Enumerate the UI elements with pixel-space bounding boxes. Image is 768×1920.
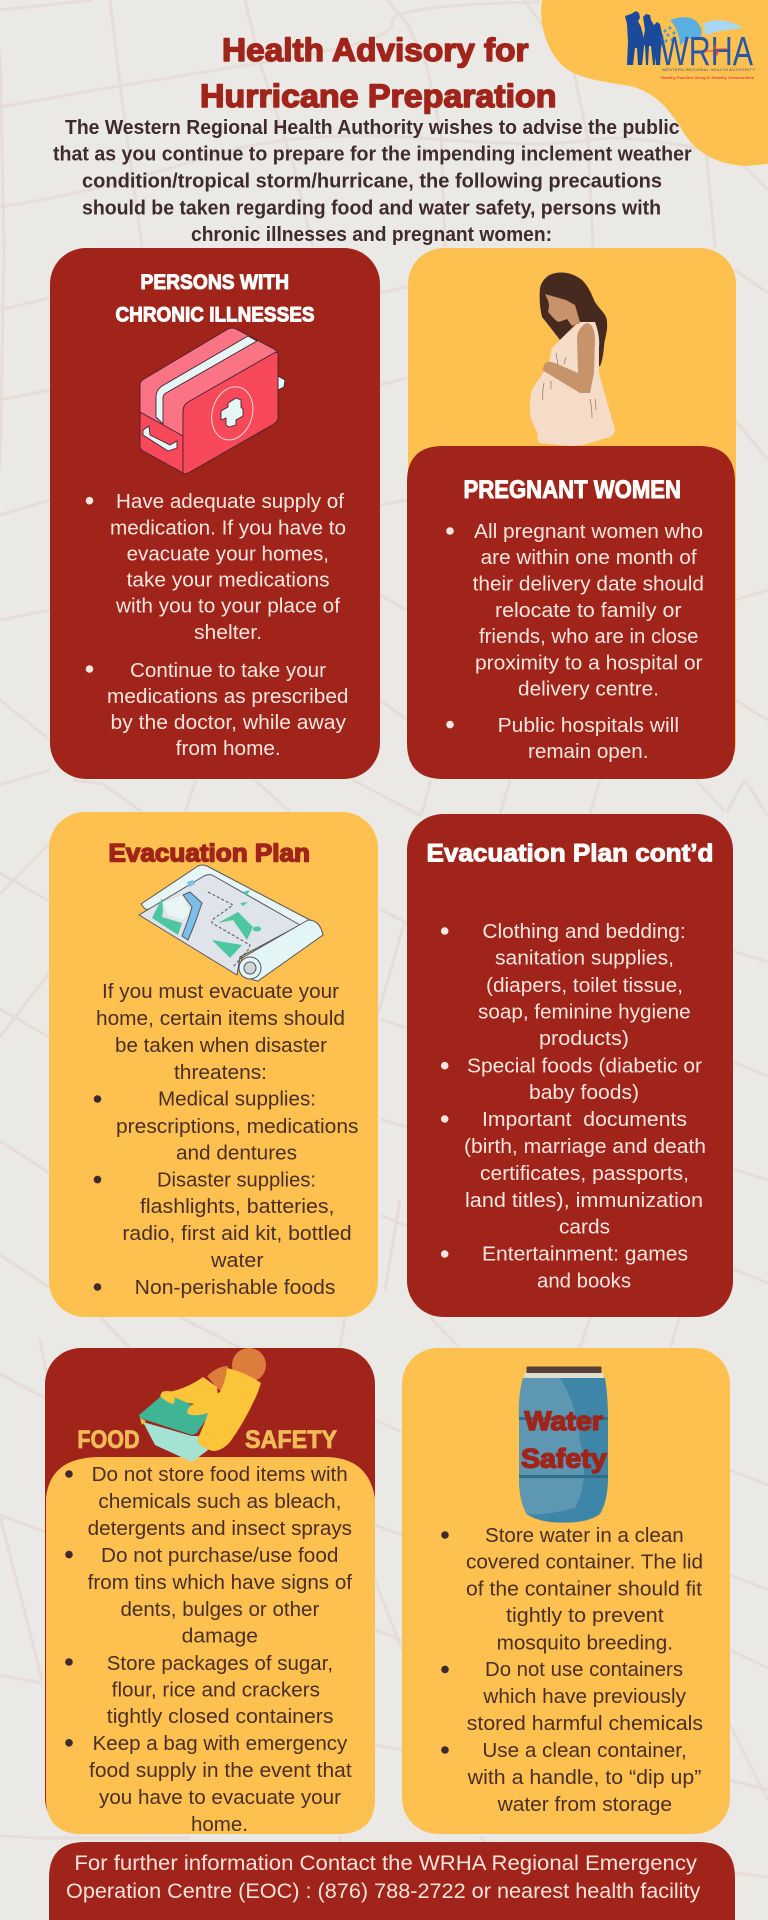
panel: evacuation plan continued: [407, 814, 733, 1317]
heading: water safety: Water: [524, 1406, 603, 1436]
heading: food safety: [77, 1426, 337, 1454]
text: pregnant women advice: are within one month of: [481, 547, 697, 569]
text: water safety advice: stored harmful chemicals: [467, 1713, 703, 1735]
text: pregnant women advice: [446, 521, 704, 763]
intro text: The Western Regional Health Authority wishes to advise the public: [65, 117, 680, 139]
text: food safety advice: Do not purchase/use food: [101, 1545, 338, 1567]
icon: water barrel: [519, 1366, 608, 1523]
intro text: chronic illnesses and pregnant women:: [191, 224, 552, 246]
text: evacuation items list continued: products): [539, 1028, 629, 1050]
text: evacuation items list: and dentures: [176, 1143, 297, 1165]
text: evacuation items list continued: and books: [537, 1270, 631, 1292]
title: [200, 32, 556, 114]
text: pregnant women advice: their delivery date should: [473, 574, 704, 596]
heading: pregnant women: PREGNANT WOMEN: [464, 476, 681, 504]
text: evacuation items list continued: soap, feminine hygiene: [478, 1002, 691, 1024]
text: water safety advice: tightly to prevent: [506, 1605, 664, 1627]
icon: rolled map: [139, 865, 323, 981]
text: chronic illness advice: Have adequate supply of: [116, 491, 344, 513]
heading: evacuation plan: Evacuation Plan: [108, 839, 310, 867]
text: evacuation items list continued: baby foods): [529, 1082, 639, 1104]
text: food safety advice: flour, rice and crackers: [112, 1680, 320, 1702]
text: water safety advice: Use a clean container,: [482, 1740, 687, 1762]
text: pregnant women advice: delivery centre.: [518, 679, 659, 701]
text: evacuation items list: be taken when disaster: [115, 1035, 327, 1057]
text: evacuation items list: Medical supplies:: [158, 1089, 316, 1111]
text: chronic illness advice: from home.: [176, 738, 281, 760]
text: food safety advice: Keep a bag with emergency: [93, 1733, 347, 1755]
text: chronic illness advice: take your medications: [127, 569, 330, 591]
panel: persons with chronic illnesses: [50, 248, 380, 779]
heading: food safety: FOOD: [77, 1426, 140, 1454]
text: food safety advice: dents, bulges or other: [120, 1599, 320, 1621]
footer: contact information: For further information Contact the WRHA Regional Emergency: [74, 1852, 698, 1875]
text: evacuation items list continued: Important documents: [482, 1109, 687, 1131]
text: food safety advice: Store packages of sugar,: [107, 1653, 333, 1675]
text: evacuation items list: [94, 981, 358, 1299]
text: chronic illness advice: evacuate your homes,: [127, 544, 329, 566]
text: chronic illness advice: medications as prescribed: [107, 686, 348, 708]
text: evacuation items list continued: land titles), immunization: [465, 1190, 703, 1212]
text: evacuation items list continued: sanitation supplies,: [495, 948, 674, 970]
footer: contact information: Operation Centre (EOC) : (876) 788-2722 or nearest health facility: [66, 1880, 701, 1903]
text: water safety advice: covered container. The lid: [466, 1552, 703, 1574]
text: water safety advice: with a handle, to “dip up”: [467, 1767, 701, 1789]
icon: pregnant woman: [530, 272, 615, 446]
text: water safety advice: water from storage: [497, 1794, 672, 1816]
text: evacuation items list: threatens:: [174, 1062, 267, 1084]
text: evacuation items list: Disaster supplies:: [157, 1169, 316, 1191]
panel: pregnant women: [407, 248, 736, 779]
icon: gloved hands holding food container: [139, 1348, 266, 1462]
title: Hurricane Preparation: [200, 78, 556, 114]
text: evacuation items list continued: (diapers, toilet tissue,: [486, 975, 683, 997]
sub-panel: pregnant women text: [407, 446, 735, 779]
text: water safety advice: mosquito breeding.: [497, 1632, 673, 1654]
text: evacuation items list continued: Special foods (diabetic or: [467, 1056, 702, 1078]
text: food safety advice: detergents and insect sprays: [88, 1518, 352, 1540]
panel: food safety: [45, 1348, 375, 1836]
text: food safety advice: from tins which have signs of: [88, 1572, 352, 1594]
text: evacuation items list: flashlights, batteries,: [140, 1196, 334, 1218]
heading: water safety: [521, 1406, 607, 1474]
text: evacuation items list continued: cards: [559, 1217, 610, 1239]
intro text: should be taken regarding food and water safety, persons with: [82, 198, 661, 220]
intro text: that as you continue to prepare for the impending inclement weather: [53, 144, 692, 166]
logo: WRHA: [625, 11, 755, 80]
intro text: condition/tropical storm/hurricane, the following precautions: [82, 171, 662, 193]
text: evacuation items list continued: Entertainment: games: [482, 1244, 688, 1266]
text: chronic illness advice: with you to your place of: [115, 596, 340, 618]
heading: persons with chronic illnesses: CHRONIC ILLNESSES: [116, 303, 314, 326]
icon: first aid kit: [140, 328, 285, 474]
text: chronic illness advice: by the doctor, while away: [110, 712, 346, 734]
text: evacuation items list continued: Clothing and bedding:: [482, 921, 686, 943]
text: pregnant women advice: remain open.: [528, 741, 648, 763]
text: evacuation items list: prescriptions, medications: [116, 1116, 358, 1138]
decorative corner blob: [541, 0, 768, 166]
sub-panel: food safety text background: [46, 1457, 375, 1834]
text: chronic illness advice: shelter.: [194, 622, 262, 644]
intro text: [53, 117, 692, 246]
text: pregnant women advice: All pregnant women who: [474, 521, 703, 543]
text: evacuation items list continued: (birth, marriage and death: [464, 1136, 706, 1158]
text: food safety advice: home.: [191, 1814, 248, 1836]
footer: contact information: [49, 1842, 735, 1920]
text: pregnant women advice: Public hospitals will: [498, 715, 679, 737]
text: evacuation items list: If you must evacuate your: [102, 981, 339, 1003]
text: chronic illness advice: medication. If you have to: [110, 518, 346, 540]
text: pregnant women advice: friends, who are in close: [479, 626, 698, 648]
text: food safety advice: chemicals such as bleach,: [98, 1491, 341, 1513]
heading: evacuation plan cont'd: Evacuation Plan cont’d: [426, 839, 714, 867]
heading: water safety: Safety: [521, 1444, 607, 1474]
text: chronic illness advice: Continue to take your: [130, 660, 326, 682]
text: food safety advice: [65, 1464, 352, 1836]
text: evacuation items list continued: [441, 921, 706, 1292]
heading: persons with chronic illnesses: [116, 271, 314, 326]
text: food safety advice: Do not store food items with: [92, 1464, 348, 1486]
text: evacuation items list: Non-perishable foods: [135, 1277, 336, 1299]
text: evacuation items list: radio, first aid kit, bottled: [122, 1223, 352, 1245]
title: Health Advisory for: [222, 32, 528, 68]
text: water safety advice: of the container should fit: [466, 1579, 702, 1601]
text: chronic illness advice: [86, 491, 348, 760]
text: evacuation items list: home, certain items should: [96, 1008, 345, 1030]
text: pregnant women advice: proximity to a hospital or: [475, 653, 703, 675]
heading: persons with chronic illnesses: PERSONS WITH: [140, 271, 289, 294]
text: water safety advice: [441, 1525, 703, 1816]
logo: WRHA: WESTERN REGIONAL HEALTH AUTHORITY: [662, 67, 755, 72]
text: water safety advice: which have previously: [482, 1686, 686, 1708]
text: water safety advice: Do not use containers: [485, 1659, 683, 1681]
text: pregnant women advice: relocate to family or: [495, 600, 682, 622]
text: evacuation items list: water: [210, 1250, 264, 1272]
text: evacuation items list continued: certificates, passports,: [480, 1163, 689, 1185]
text: water safety advice: Store water in a clean: [485, 1525, 684, 1547]
text: food safety advice: damage: [182, 1626, 258, 1648]
panel: water safety: [402, 1348, 730, 1834]
panel: evacuation plan: [49, 812, 378, 1317]
logo: WRHA: Healthy Families living in Healthy Communities: [661, 75, 755, 80]
heading: food safety: SAFETY: [245, 1426, 337, 1454]
text: food safety advice: food supply in the event that: [89, 1760, 352, 1782]
text: food safety advice: you have to evacuate your: [99, 1787, 341, 1809]
text: food safety advice: tightly closed containers: [107, 1706, 334, 1728]
